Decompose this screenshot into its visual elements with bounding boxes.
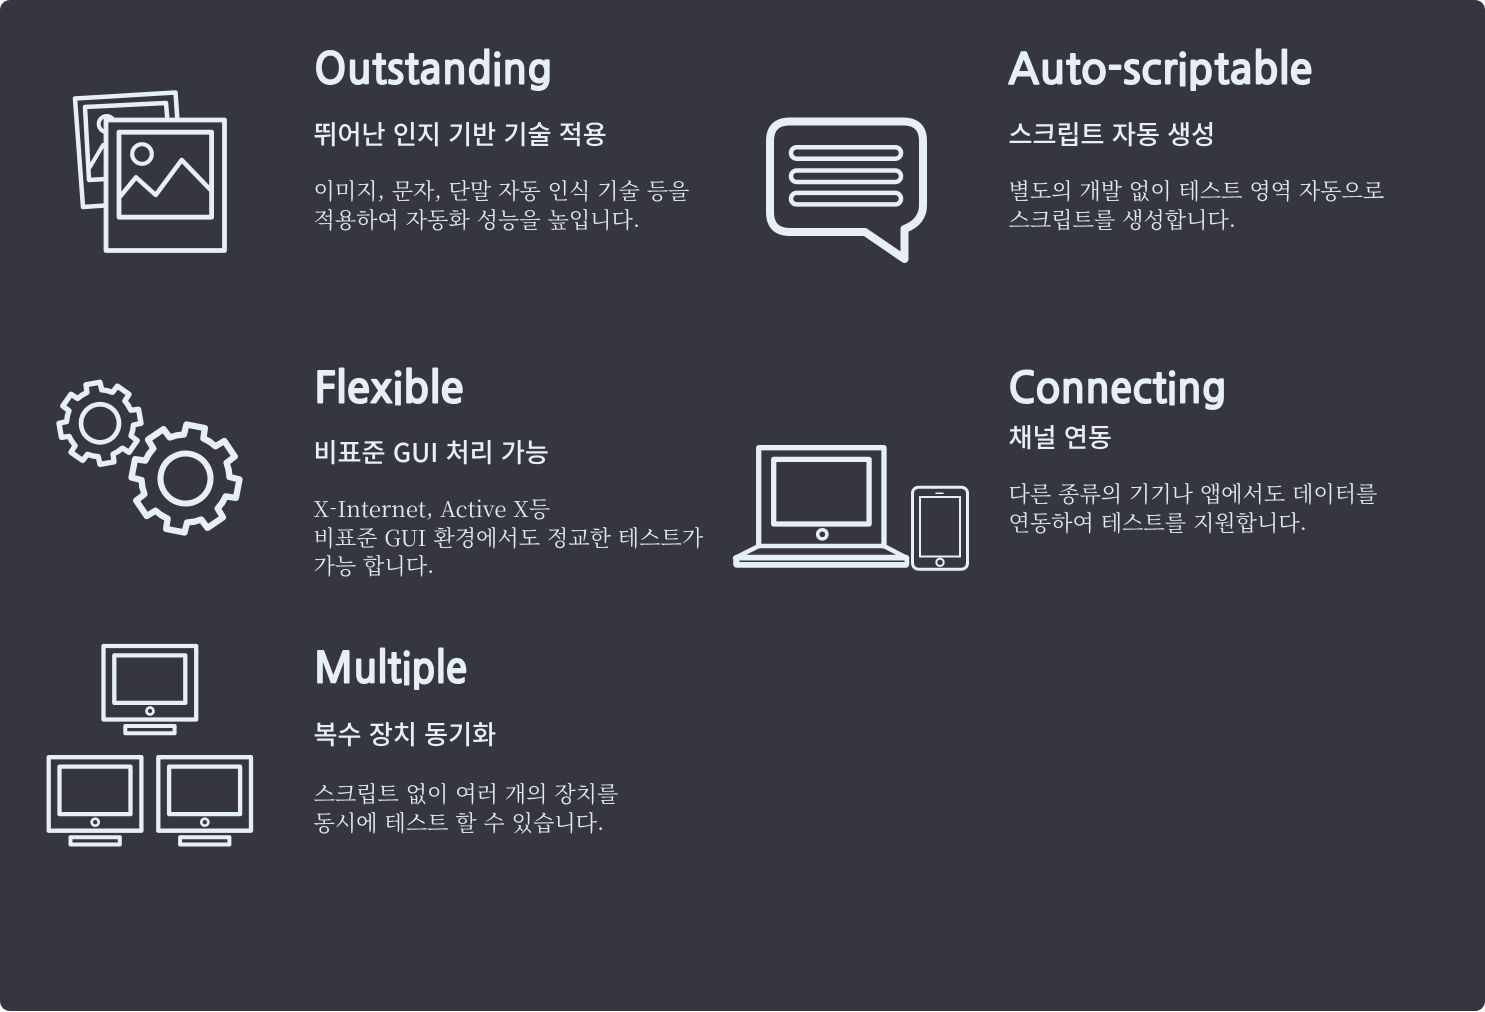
text block: Flexible: 가능 합니다.	[314, 550, 434, 581]
monitor: bottom right	[158, 757, 251, 844]
monitor: bottom left	[49, 757, 141, 844]
heading: Outstanding: Outstanding	[314, 49, 552, 91]
text block: Multiple	[314, 778, 618, 838]
text block: Flexible	[314, 493, 704, 581]
subheading: Multiple: 복수 장치 동기화	[314, 714, 496, 752]
tablet	[912, 487, 968, 569]
heading: Auto-scriptable: Auto-scriptable	[1008, 49, 1313, 91]
subheading: Auto-scriptable: 스크립트 자동 생성	[1008, 114, 1215, 152]
small gear	[53, 376, 147, 470]
heading: Connecting: Connecting	[1008, 368, 1226, 410]
subheading: Connecting: 채널 연동	[1008, 417, 1112, 455]
laptop	[735, 448, 908, 566]
heading: Flexible: Flexible	[314, 368, 464, 410]
icon: speech bubble	[770, 122, 923, 259]
text block: Auto-scriptable: 스크립트를 생성합니다.	[1008, 204, 1236, 235]
text block: Flexible: X-Internet, Active X등	[314, 493, 550, 524]
text block: Outstanding: 적용하여 자동화 성능을 높입니다.	[314, 204, 640, 235]
text block: Connecting: 다른 종류의 기기나 앱에서도 데이터를	[1008, 478, 1377, 509]
large gear	[123, 416, 248, 541]
icon: laptop and tablet	[735, 448, 968, 569]
text block: Flexible: 비표준 GUI 환경에서도 정교한 테스트가	[314, 522, 703, 553]
text block: Outstanding	[314, 175, 689, 235]
heading: Multiple: Multiple	[314, 648, 467, 690]
icon: gears	[53, 376, 248, 541]
subheading: Outstanding: 뛰어난 인지 기반 기술 적용	[314, 114, 607, 152]
text block: Connecting: 연동하여 테스트를 지원합니다.	[1008, 507, 1307, 538]
icon: photos	[75, 92, 224, 250]
text block: Outstanding: 이미지, 문자, 단말 자동 인식 기술 등을	[314, 175, 689, 206]
icon: networked monitors	[49, 646, 251, 844]
subheading: Flexible: 비표준 GUI 처리 가능	[314, 432, 549, 470]
text block: Connecting	[1008, 478, 1377, 538]
text block: Multiple: 스크립트 없이 여러 개의 장치를	[314, 778, 618, 809]
text block: Auto-scriptable	[1008, 175, 1384, 235]
text block: Auto-scriptable: 별도의 개발 없이 테스트 영역 자동으로	[1008, 175, 1384, 206]
text block: Multiple: 동시에 테스트 할 수 있습니다.	[314, 807, 604, 838]
monitor: top	[104, 646, 196, 733]
